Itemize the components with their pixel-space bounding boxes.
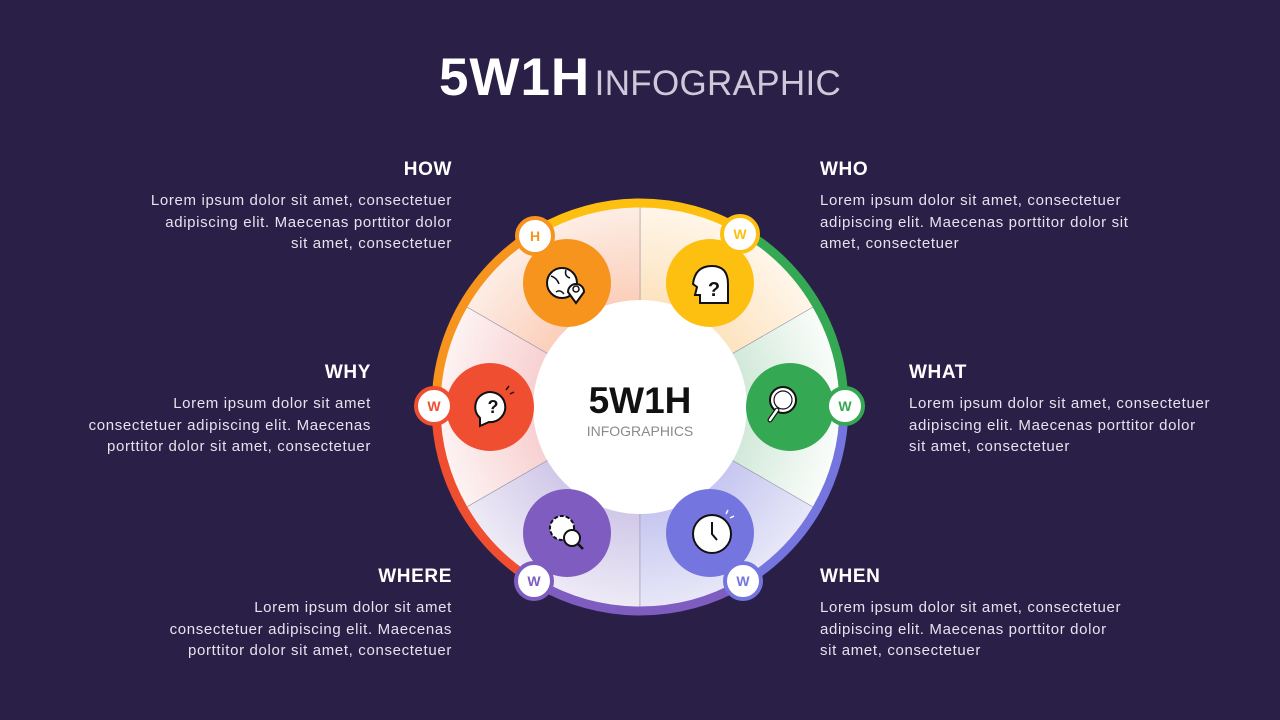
icon: WHY speech question	[446, 363, 534, 451]
text: WHY: WHY	[325, 362, 371, 383]
text: WHY: Lorem ipsum dolor sit amet	[173, 395, 371, 412]
center circle: 5W1H	[589, 380, 691, 421]
icon: WHAT magnifier	[746, 363, 834, 451]
text: WHY: porttitor dolor sit amet, consectetuer	[107, 438, 371, 455]
ring arcs	[436, 203, 844, 611]
text: WHAT: WHAT	[909, 362, 967, 383]
badges: W	[527, 573, 541, 589]
text: WHO: Lorem ipsum dolor sit amet, consectetuer	[820, 192, 1121, 209]
text: HOW: Lorem ipsum dolor sit amet, consectetuer	[151, 192, 452, 209]
text: WHEN: Lorem ipsum dolor sit amet, consectetuer	[820, 599, 1121, 616]
text: HOW: sit amet, consectetuer	[291, 235, 452, 252]
text: WHAT: sit amet, consectetuer	[909, 438, 1070, 455]
center circle: INFOGRAPHICS	[587, 423, 693, 439]
text: WHY: consectetuer adipiscing elit. Maecenas	[89, 417, 371, 434]
text: WHAT: adipiscing elit. Maecenas porttitor dolor	[909, 417, 1196, 434]
text: WHEN: WHEN	[820, 566, 880, 587]
icon: WHO head question	[666, 239, 754, 327]
text: WHERE: Lorem ipsum dolor sit amet	[254, 599, 452, 616]
text: WHERE: WHERE	[378, 566, 452, 587]
text: WHEN: sit amet, consectetuer	[820, 642, 981, 659]
icon: WHY speech question: ?	[488, 397, 498, 417]
text: HOW	[151, 159, 452, 252]
center circle	[533, 300, 747, 514]
badges: W	[736, 573, 750, 589]
badges: W	[427, 398, 441, 414]
text: WHO: adipiscing elit. Maecenas porttitor dolor sit	[820, 214, 1129, 231]
text: WHERE	[170, 566, 452, 659]
text: WHO	[820, 159, 1129, 252]
text: WHEN	[820, 566, 1121, 659]
text: WHERE: consectetuer adipiscing elit. Maecenas	[170, 621, 452, 638]
text: HOW: HOW	[404, 159, 452, 180]
sectors	[438, 205, 842, 609]
title: 5W1H INFOGRAPHIC	[439, 48, 841, 107]
badges: W	[733, 226, 747, 242]
badges: W	[838, 398, 852, 414]
text: HOW: adipiscing elit. Maecenas porttitor dolor	[165, 214, 452, 231]
text: WHERE: porttitor dolor sit amet, consectetuer	[188, 642, 452, 659]
text: WHAT: Lorem ipsum dolor sit amet, consectetuer	[909, 395, 1210, 412]
text: WHO: amet, consectetuer	[820, 235, 959, 252]
icon: WHERE gear search	[523, 489, 611, 577]
badges: H	[530, 228, 540, 244]
text: WHY	[89, 362, 371, 455]
badges	[416, 216, 863, 599]
icon: WHO head question: ?	[708, 279, 720, 301]
text: WHO: WHO	[820, 159, 868, 180]
text: WHAT	[909, 362, 1210, 455]
icon: HOW globe pin	[523, 239, 611, 327]
icon: WHEN clock	[666, 489, 754, 577]
text: WHEN: adipiscing elit. Maecenas porttitor dolor	[820, 621, 1107, 638]
